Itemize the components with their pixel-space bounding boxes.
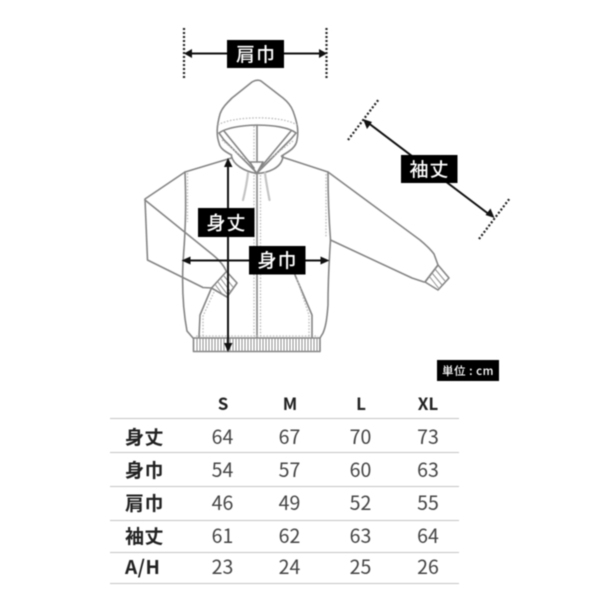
row: body width: 54 xyxy=(212,454,233,483)
row: body width: 身巾 xyxy=(125,456,164,483)
unit label: 単位 : cm xyxy=(442,363,494,379)
pockets xyxy=(199,275,312,337)
row: body width: 63 xyxy=(417,454,439,483)
row: sleeve length: 64 xyxy=(417,520,439,549)
row: body length: 67 xyxy=(279,421,300,450)
row: sleeve length: 63 xyxy=(350,520,371,549)
sleeve length measure: 袖丈 xyxy=(409,155,450,182)
row: armhole: A/H xyxy=(124,553,160,580)
unit label xyxy=(437,360,499,381)
shoulder width measure xyxy=(184,28,327,80)
row: armhole: 26 xyxy=(417,551,439,580)
header row: M xyxy=(283,390,297,415)
row: sleeve length: 袖丈 xyxy=(125,522,164,549)
row: body width xyxy=(125,454,439,483)
left sleeve xyxy=(145,172,237,297)
row: shoulder width: 52 xyxy=(350,487,371,516)
row: sleeve length xyxy=(125,520,439,549)
row: shoulder width: 55 xyxy=(417,487,439,516)
right sleeve xyxy=(328,172,449,290)
body width measure: 身巾 xyxy=(257,246,298,273)
body length measure xyxy=(198,158,254,352)
row: shoulder width: 49 xyxy=(279,487,300,516)
table rules xyxy=(110,418,459,584)
row: armhole: 25 xyxy=(350,551,371,580)
row: armhole: 23 xyxy=(212,551,233,580)
sleeve length measure xyxy=(348,99,510,239)
body xyxy=(183,157,330,338)
header row xyxy=(218,390,438,415)
shoulder width measure: 肩巾 xyxy=(236,40,276,67)
row: body width: 57 xyxy=(279,454,300,483)
hoodie illustration xyxy=(145,80,449,351)
hood xyxy=(217,80,298,172)
row: sleeve length: 61 xyxy=(212,520,233,549)
row: body width: 60 xyxy=(350,454,371,483)
header row: S xyxy=(218,390,228,415)
row: sleeve length: 62 xyxy=(279,520,300,549)
hem rib xyxy=(194,338,320,352)
header row: L xyxy=(356,390,366,415)
row: shoulder width xyxy=(125,487,439,516)
row: shoulder width: 肩巾 xyxy=(125,489,164,516)
row: armhole xyxy=(124,551,439,580)
header row: XL xyxy=(418,390,438,415)
row: body length xyxy=(125,421,439,450)
row: armhole: 24 xyxy=(279,551,300,580)
row: body length: 70 xyxy=(350,421,371,450)
size table xyxy=(110,390,459,584)
drawstrings xyxy=(243,173,270,200)
body length measure: 身丈 xyxy=(206,208,247,236)
row: shoulder width: 46 xyxy=(212,487,233,516)
body width measure xyxy=(182,246,330,274)
row: body length: 身丈 xyxy=(125,423,164,450)
collar xyxy=(232,156,283,174)
row: body length: 73 xyxy=(417,421,439,450)
row: body length: 64 xyxy=(212,421,233,450)
